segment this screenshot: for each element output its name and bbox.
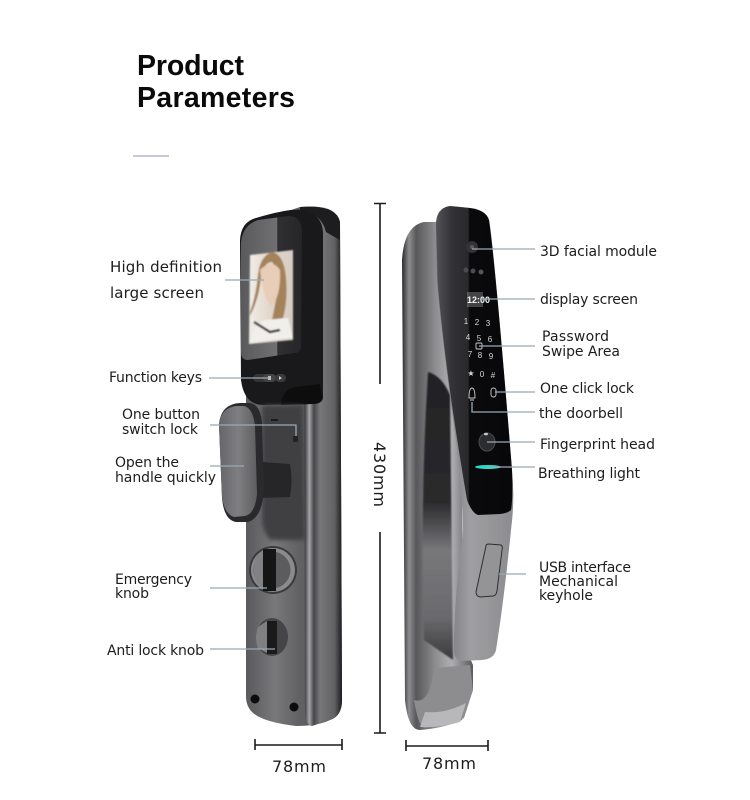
right labels: the doorbell bbox=[539, 406, 623, 422]
shadow area behind handle bbox=[262, 405, 305, 540]
keyhole cover bbox=[476, 544, 502, 597]
keypad: 9 bbox=[489, 352, 494, 361]
keypad: 2 bbox=[475, 318, 480, 327]
panel dark upper bbox=[436, 206, 512, 515]
title: Parameters bbox=[137, 82, 295, 114]
left labels: switch lock bbox=[122, 422, 199, 438]
right labels: Mechanical bbox=[539, 574, 618, 590]
keypad bbox=[464, 317, 496, 380]
screen glass bbox=[241, 216, 302, 360]
title bbox=[137, 50, 295, 114]
right width dimension 78mm: 78mm bbox=[422, 754, 476, 773]
display clock bbox=[467, 292, 490, 307]
right labels: Password bbox=[542, 329, 609, 345]
breathing light bbox=[475, 465, 501, 469]
screw holes bbox=[250, 694, 260, 704]
right labels: Fingerprint head bbox=[540, 437, 655, 453]
front panel bbox=[436, 206, 513, 661]
lock icon bbox=[491, 388, 496, 397]
right labels: Breathing light bbox=[538, 466, 640, 482]
left width dimension 78mm bbox=[255, 739, 342, 776]
dark top of rails bbox=[300, 207, 340, 240]
handle base bbox=[414, 665, 473, 728]
door handle bbox=[219, 403, 264, 522]
right callout lines bbox=[472, 249, 535, 574]
right labels: Swipe Area bbox=[542, 344, 620, 360]
keypad: # bbox=[491, 371, 496, 380]
left labels: High definition bbox=[110, 258, 222, 276]
facial module bbox=[464, 241, 484, 274]
left labels bbox=[107, 258, 222, 659]
keypad: ★ bbox=[467, 369, 475, 378]
keypad: 5 bbox=[477, 334, 482, 343]
right labels: USB interface bbox=[539, 560, 631, 576]
right labels: display screen bbox=[540, 292, 638, 308]
right width dimension 78mm bbox=[406, 740, 488, 773]
right lock side view bbox=[402, 206, 513, 730]
right labels bbox=[538, 244, 657, 604]
right labels: One click lock bbox=[540, 381, 635, 397]
keypad: 0 bbox=[480, 370, 485, 379]
height dimension 430mm: 430mm bbox=[370, 442, 389, 507]
handle cavity bbox=[423, 372, 453, 660]
fingerprint head bbox=[479, 433, 495, 451]
keypad: 1 bbox=[464, 317, 469, 326]
left labels: handle quickly bbox=[115, 470, 216, 486]
handle neck bbox=[258, 462, 292, 498]
left callout lines bbox=[209, 280, 296, 649]
doorbell icon bbox=[469, 388, 475, 400]
emergency knob bbox=[249, 546, 297, 594]
back plate bbox=[246, 207, 342, 726]
display clock: 12:00 bbox=[467, 295, 490, 305]
back plate bbox=[402, 222, 473, 730]
side rails bbox=[304, 207, 342, 726]
height dimension 430mm bbox=[370, 204, 389, 733]
right labels: keyhole bbox=[539, 588, 593, 604]
left labels: Anti lock knob bbox=[107, 643, 204, 659]
left lock front view bbox=[219, 207, 342, 726]
left labels: Function keys bbox=[109, 370, 202, 386]
keypad: 4 bbox=[466, 333, 471, 342]
left labels: large screen bbox=[110, 284, 204, 302]
face photo bbox=[249, 250, 293, 344]
recess under screen bbox=[281, 384, 322, 405]
right labels: 3D facial module bbox=[540, 244, 657, 260]
anti lock knob bbox=[256, 618, 288, 656]
title: Product bbox=[137, 50, 244, 82]
keypad: 7 bbox=[468, 350, 473, 359]
left width dimension 78mm: 78mm bbox=[272, 757, 326, 776]
function key buttons bbox=[253, 374, 286, 382]
keypad: 8 bbox=[478, 351, 483, 360]
keypad: 3 bbox=[486, 319, 491, 328]
screen body bbox=[240, 210, 323, 405]
left labels: Emergency bbox=[115, 572, 192, 588]
left labels: knob bbox=[115, 586, 149, 602]
left labels: Open the bbox=[115, 455, 179, 471]
keypad: 6 bbox=[488, 335, 493, 344]
left labels: One button bbox=[122, 407, 200, 423]
